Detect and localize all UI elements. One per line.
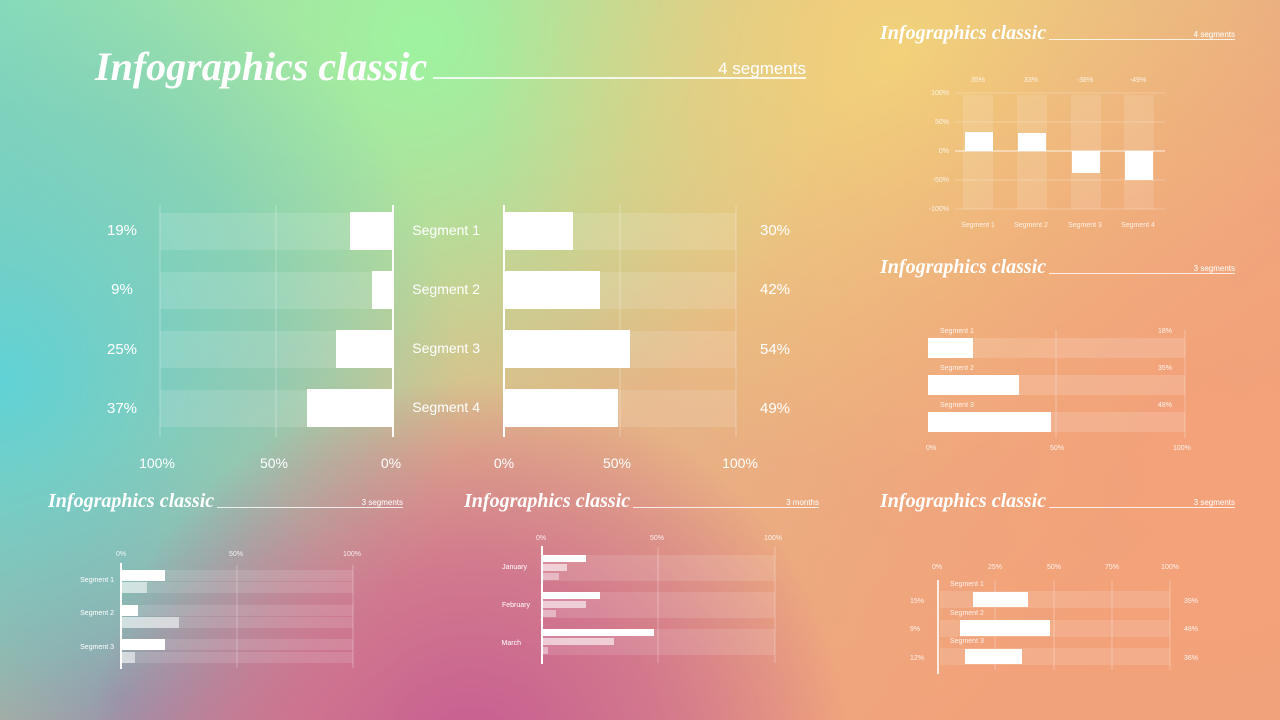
chart: middle right bars: 18%	[1158, 328, 1172, 335]
chart: bottom left grouped bars: 0%	[116, 551, 126, 558]
chart: bottom left grouped bars: Segment 3	[80, 644, 114, 651]
header: top right: Infographics classic	[879, 22, 1046, 44]
chart: bottom right floating bars: 50%	[1047, 564, 1061, 571]
chart: middle right bars: 50%	[1050, 445, 1064, 452]
chart: bottom right floating bars: 15%	[910, 598, 924, 605]
chart: bottom right floating bars: 75%	[1105, 564, 1119, 571]
chart: bottom right floating bars: Segment 2	[950, 610, 984, 617]
chart: main left mirrored bars: 50%	[260, 455, 288, 471]
chart: column positive/negative: 100%	[931, 90, 949, 97]
header: top right: 4 segments	[1194, 30, 1235, 39]
chart: main right bars: 100%	[722, 455, 758, 471]
chart: column positive/negative: 33%	[1024, 77, 1038, 84]
chart: bottom left grouped bars: Segment 2	[80, 610, 114, 617]
header: bottom right: 3 segments	[1194, 498, 1235, 507]
chart: column positive/negative: Segment 4	[1121, 222, 1155, 229]
chart: column positive/negative: Segment 2	[1014, 222, 1048, 229]
chart: main right bars: 30%	[760, 222, 790, 239]
chart: main right bars: 42%	[760, 281, 790, 298]
chart: bottom left grouped bars	[80, 551, 361, 669]
chart: column positive/negative: -100%	[929, 206, 949, 213]
chart: bottom middle monthly bars: January	[502, 564, 527, 571]
chart: main right bars: Segment 2	[412, 281, 480, 297]
chart: main right bars: Segment 1	[412, 222, 480, 238]
chart: main left mirrored bars: 25%	[107, 341, 137, 358]
main header: Infographics classic	[94, 44, 427, 89]
chart: bottom right floating bars: 25%	[988, 564, 1002, 571]
chart: bottom left grouped bars: 100%	[343, 551, 361, 558]
chart: bottom right floating bars	[910, 564, 1198, 674]
chart: main left mirrored bars: 100%	[139, 455, 175, 471]
chart: bottom right floating bars: 0%	[932, 564, 942, 571]
chart: middle right bars: 48%	[1158, 402, 1172, 409]
chart: bottom right floating bars: Segment 1	[950, 581, 984, 588]
chart: bottom left grouped bars: Segment 1	[80, 577, 114, 584]
chart: bottom right floating bars: 39%	[1184, 598, 1198, 605]
header: bottom left: 3 segments	[362, 498, 403, 507]
header: middle right	[879, 256, 1235, 278]
header: bottom right	[879, 490, 1235, 512]
chart: column positive/negative	[929, 77, 1165, 229]
chart: column positive/negative: 35%	[971, 77, 985, 84]
chart: main right bars: 54%	[760, 341, 790, 358]
chart: column positive/negative: 0%	[939, 148, 949, 155]
chart: bottom middle monthly bars	[502, 535, 782, 664]
chart: column positive/negative: -38%	[1077, 77, 1093, 84]
chart: column positive/negative: Segment 3	[1068, 222, 1102, 229]
chart: middle right bars: 35%	[1158, 365, 1172, 372]
header: bottom middle: 3 months	[786, 498, 819, 507]
chart: main right bars: 49%	[760, 400, 790, 417]
chart: middle right bars: Segment 2	[940, 365, 974, 372]
chart: main right bars: 50%	[603, 455, 631, 471]
chart: middle right bars: Segment 3	[940, 402, 974, 409]
chart: middle right bars: 100%	[1173, 445, 1191, 452]
chart: main left mirrored bars: 19%	[107, 222, 137, 239]
header: bottom middle	[463, 490, 819, 512]
chart: bottom middle monthly bars: February	[502, 602, 530, 609]
header: bottom right: Infographics classic	[879, 490, 1046, 512]
chart: bottom middle monthly bars: 100%	[764, 535, 782, 542]
chart: main right bars	[412, 205, 790, 471]
main header: 4 segments	[718, 59, 806, 78]
chart: main right bars: 0%	[494, 455, 514, 471]
chart: main left mirrored bars: 0%	[381, 455, 401, 471]
chart: main left mirrored bars: 9%	[111, 281, 133, 298]
chart: bottom right floating bars: Segment 3	[950, 638, 984, 645]
chart: column positive/negative: Segment 1	[961, 222, 995, 229]
chart: bottom middle monthly bars: 50%	[650, 535, 664, 542]
chart: bottom right floating bars: 100%	[1161, 564, 1179, 571]
chart: bottom right floating bars: 36%	[1184, 655, 1198, 662]
header: bottom left: Infographics classic	[47, 490, 214, 512]
chart: bottom right floating bars: 9%	[910, 626, 920, 633]
chart: main right bars: Segment 3	[412, 340, 480, 356]
chart: bottom right floating bars: 48%	[1184, 626, 1198, 633]
chart: bottom middle monthly bars: 0%	[536, 535, 546, 542]
chart: column positive/negative: -50%	[933, 177, 949, 184]
header: middle right: 3 segments	[1194, 264, 1235, 273]
chart: column positive/negative: -49%	[1130, 77, 1146, 84]
chart: middle right bars: Segment 1	[940, 328, 974, 335]
chart: bottom left grouped bars: 50%	[229, 551, 243, 558]
header: middle right: Infographics classic	[879, 256, 1046, 278]
header: top right	[879, 22, 1235, 44]
chart: bottom middle monthly bars: March	[502, 640, 521, 647]
header: bottom middle: Infographics classic	[463, 490, 630, 512]
chart: main right bars: Segment 4	[412, 399, 480, 415]
main header	[94, 44, 806, 89]
chart: main left mirrored bars	[107, 205, 401, 471]
chart: main left mirrored bars: 37%	[107, 400, 137, 417]
chart: middle right bars: 0%	[926, 445, 936, 452]
chart: bottom right floating bars: 12%	[910, 655, 924, 662]
header: bottom left	[47, 490, 403, 512]
chart: column positive/negative: 50%	[935, 119, 949, 126]
chart: middle right bars	[926, 328, 1191, 452]
